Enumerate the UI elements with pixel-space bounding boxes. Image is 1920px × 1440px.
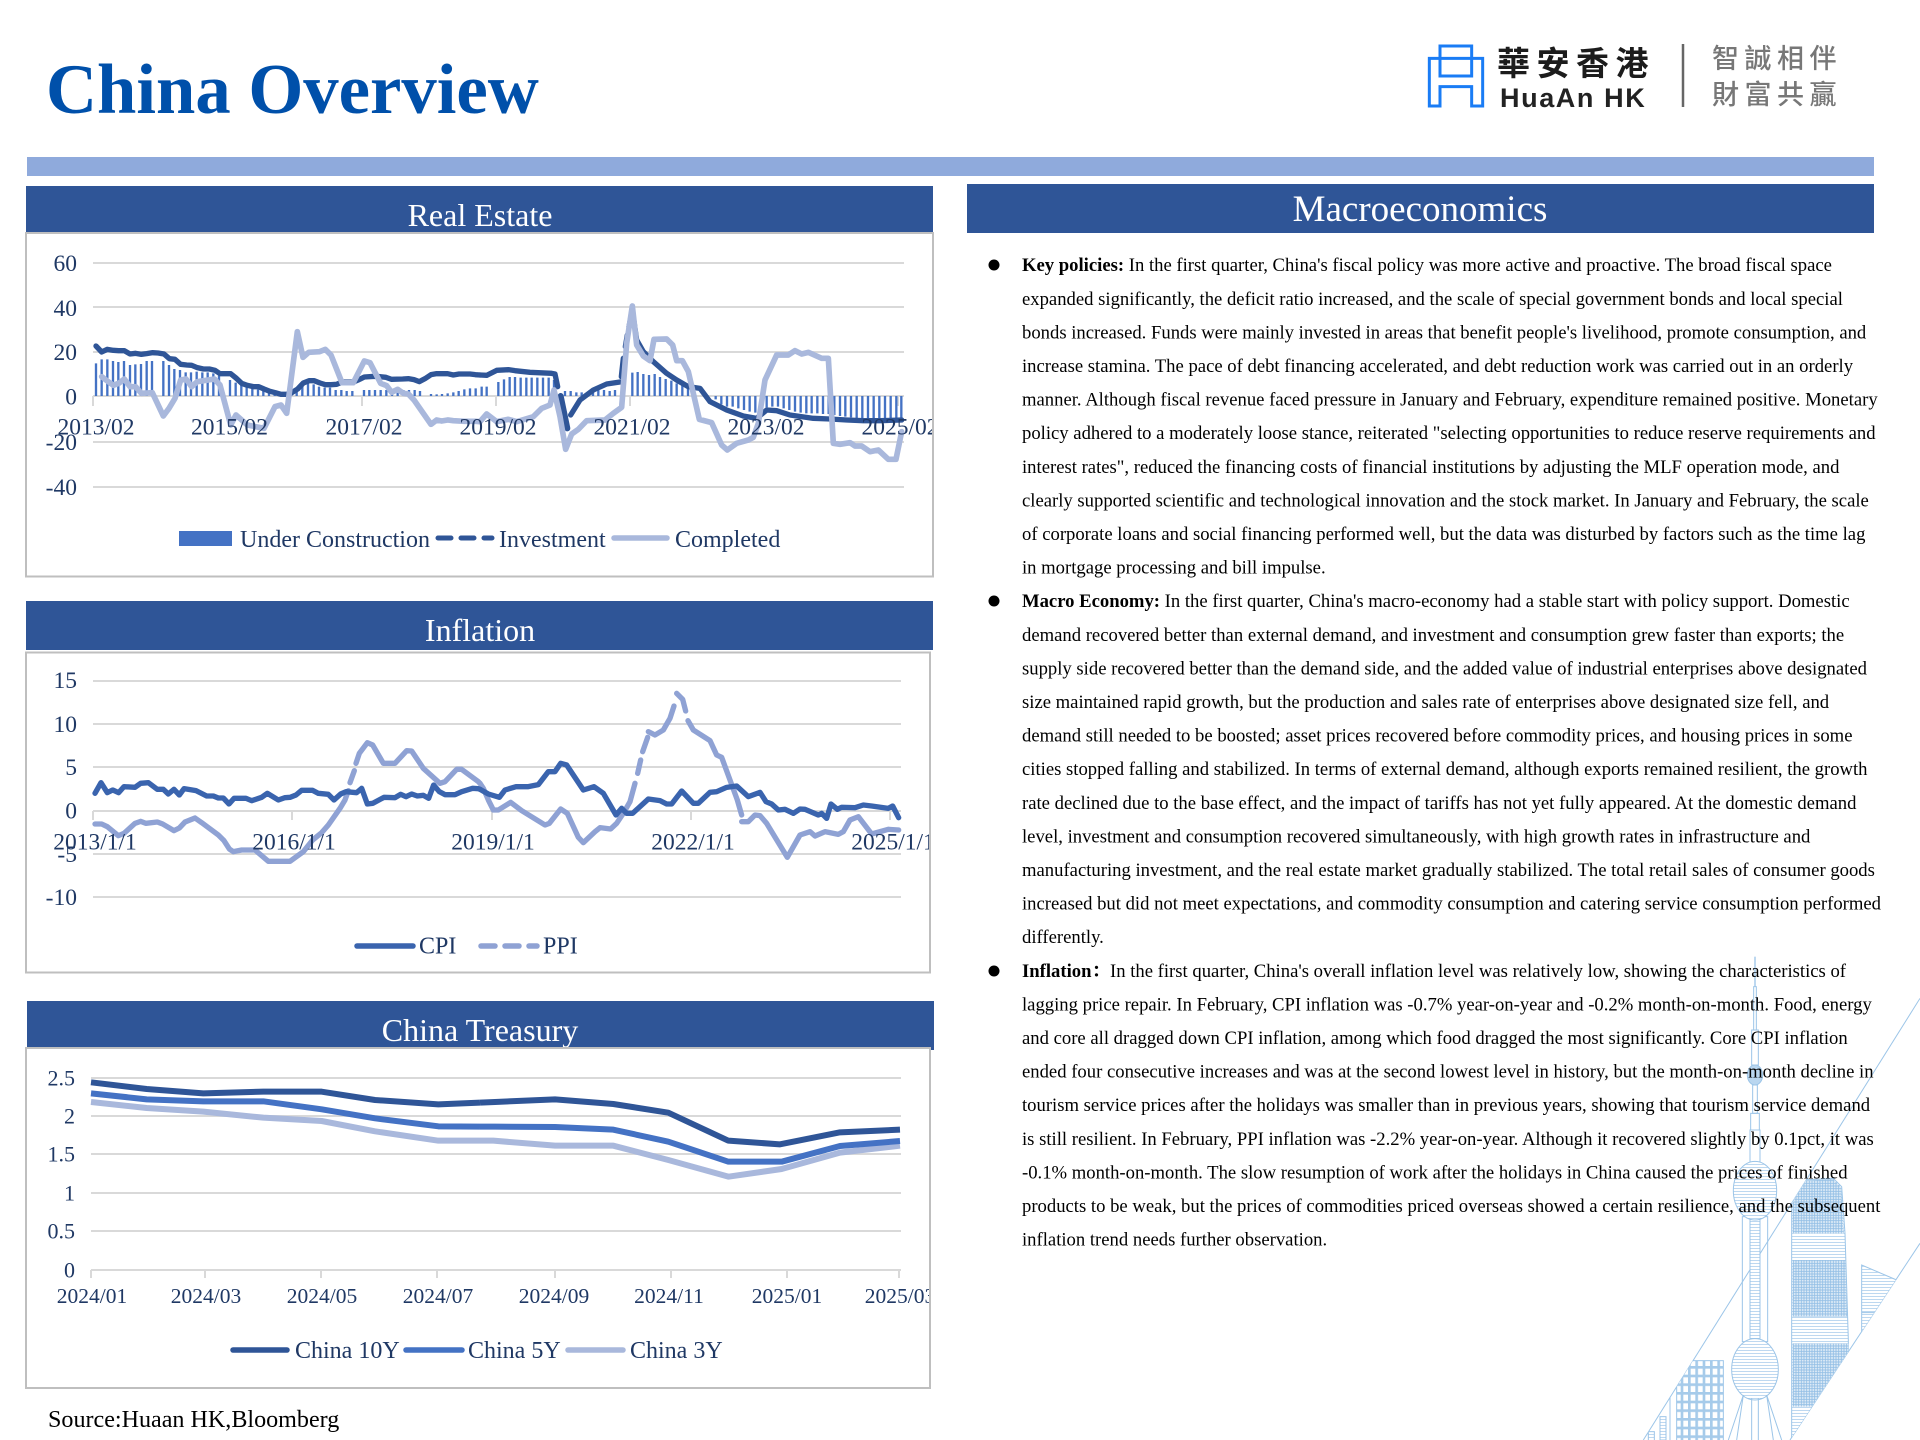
bullet: macro economy	[988, 596, 1000, 606]
x axis labels: 2024/01	[57, 1284, 127, 1308]
legend: China 10Y	[295, 1338, 400, 1364]
legend	[357, 934, 578, 960]
legend: Completed	[675, 527, 780, 553]
text block: macro economy: level, investment and consumption recovered simultaneously, with high growth rates in infrastructure and	[1022, 826, 1811, 847]
text block: inflation: products to be weak, but the prices of commodities priced overseas showed a certain resilience, and the subsequent	[1022, 1196, 1881, 1217]
x axis labels: 2024/09	[519, 1284, 589, 1308]
legend	[179, 527, 780, 553]
title: China Overview	[46, 51, 539, 129]
text block: macro economy: demand still needed to be boosted; asset prices recovered before commodity prices, and housing prices in some	[1022, 726, 1852, 747]
line series: China 5Y	[91, 1093, 900, 1162]
x axis labels	[54, 834, 929, 850]
y axis labels	[46, 251, 77, 501]
x axis labels: 2023/02	[727, 414, 805, 440]
panel heading: Real Estate: Real Estate	[408, 197, 552, 233]
legend	[233, 1338, 723, 1364]
x axis labels: 2016/1/1	[252, 830, 336, 856]
panel: Macroeconomics	[967, 184, 1882, 1251]
y axis labels	[46, 668, 77, 911]
text block: inflation: -0.1% month-on-month. The slow resumption of work after the holidays in China caused the prices of finished	[1022, 1162, 1848, 1183]
logo English name: HuaAn HK	[1500, 83, 1646, 113]
x axis labels: 2024/05	[287, 1284, 357, 1308]
text block: macro economy: manufacturing investment, and the real estate market gradually stabilized. The total retail sales of consumer goods	[1022, 860, 1875, 881]
line series: China 3Y	[91, 1102, 900, 1177]
x axis labels: 2025/01	[752, 1284, 822, 1308]
text block: macro economy: size maintained rapid growth, but the production and sales rate of enterprises above designated size fell, and	[1022, 692, 1830, 713]
bullet: key policies	[988, 260, 1000, 270]
panel heading: Inflation: Inflation	[425, 612, 535, 648]
text block: macro economy: cities stopped falling and stabilized. In terms of external demand, although exports remained resilient, the growth	[1022, 759, 1868, 780]
bullet: inflation	[988, 966, 1000, 976]
panel heading: Macroeconomics	[967, 184, 1874, 233]
text block: key policies: in mortgage processing and bill impulse.	[1022, 558, 1326, 579]
x axis labels	[58, 419, 932, 434]
text block: key policies: Key policies: In the first quarter, China's fiscal policy was more active and proactive. The broad fiscal space	[1022, 255, 1832, 276]
text block: key policies: bonds increased. Funds were mainly invested in areas that benefit people's livelihood, promote consumption, and	[1022, 322, 1867, 343]
text block: key policies: of corporate loans and social financing performed well, but the data was disturbed by factors such as the time lag	[1022, 524, 1865, 545]
legend: Under Construction	[240, 527, 430, 553]
legend: China 3Y	[630, 1338, 723, 1364]
line series: Investment	[96, 310, 902, 428]
x axis labels: 2013/1/1	[53, 830, 137, 856]
text block: macro economy: differently.	[1022, 927, 1104, 948]
logo: HuaAn HK	[1429, 37, 1842, 113]
y axis labels: 60	[54, 251, 77, 277]
text block: key policies: policy adhered to a moderately loose stance, reiterated "selecting opportunities to reduce reserve requirements and	[1022, 423, 1876, 444]
y axis labels: 10	[54, 712, 77, 738]
text block: inflation	[1022, 961, 1881, 1251]
logo Chinese name: 華安香港	[1497, 37, 1655, 85]
panel heading: China Treasury	[27, 1001, 934, 1050]
y axis labels: -5	[57, 842, 77, 868]
header rule band	[27, 157, 1874, 176]
y axis labels: 0	[65, 798, 77, 824]
line series: Completed	[102, 306, 902, 459]
background skyline illustration	[1643, 957, 1920, 1440]
y axis labels: 0.5	[48, 1218, 75, 1244]
text block: inflation: ended four consecutive increases and was at the second lowest level in history, but the month-on-month decline in	[1022, 1062, 1874, 1083]
text block: macro economy: increased but did not meet expectations, and commodity consumption and catering service consumption performed	[1022, 894, 1882, 915]
text block: inflation: In the first quarter, China's overall inflation level was relatively low, showing the characteristics of	[1110, 961, 1847, 982]
y axis labels: 15	[54, 668, 77, 694]
bar series: Under Construction	[96, 359, 901, 418]
legend: PPI	[543, 934, 578, 960]
legend: China 5Y	[468, 1338, 561, 1364]
logo divider	[1682, 44, 1684, 107]
y axis labels: 1	[64, 1180, 75, 1206]
y axis labels: 0	[64, 1258, 75, 1282]
y axis labels: 5	[65, 755, 77, 781]
text block: key policies	[1022, 255, 1878, 579]
x axis labels: 2024/11	[634, 1284, 704, 1308]
text block: inflation: tourism service prices after the holidays was smaller than in previous years, showing that tourism service demand	[1022, 1095, 1871, 1116]
panel: China Treasury	[26, 1001, 935, 1388]
text block: inflation: and core all dragged down CPI inflation, among which food dragged the most significantly. Core CPI inflation	[1022, 1028, 1848, 1049]
y axis labels: 0	[65, 384, 77, 410]
x axis labels: 2019/02	[459, 414, 537, 440]
y axis labels: 40	[54, 296, 77, 322]
y axis labels: 2.5	[48, 1066, 75, 1090]
line series: PPI	[95, 693, 899, 861]
y axis labels: 1.5	[48, 1142, 75, 1166]
line series: CPI	[95, 763, 899, 818]
panel heading: China Treasury: China Treasury	[382, 1012, 578, 1048]
text block: key policies: clearly supported scientific and technological innovation and the stock market. In January and February, the scale	[1022, 490, 1869, 511]
x axis labels: 2024/07	[403, 1284, 473, 1308]
x axis labels	[58, 1289, 929, 1303]
y axis labels: -20	[46, 430, 77, 456]
line series: China 10Y	[91, 1082, 900, 1144]
y axis labels	[48, 1066, 75, 1282]
text block: inflation: inflation trend needs further observation.	[1022, 1230, 1327, 1251]
y axis labels: 2	[64, 1104, 75, 1128]
text block: key policies: expanded significantly, the deficit ratio increased, and the scale of special government bonds and local special	[1022, 289, 1843, 310]
x axis labels: 2022/1/1	[651, 830, 735, 856]
text block: key policies: manner. Although fiscal revenue faced pressure in January and February, expenditure remained positive. Monetary	[1022, 390, 1878, 411]
legend: Investment	[499, 527, 606, 553]
text block: macro economy	[1022, 591, 1882, 948]
y axis labels: -40	[46, 475, 77, 501]
panel: Real Estate	[26, 186, 939, 576]
text block: key policies: interest rates", reduced the financing costs of financial institutions by adjusting the MLF operation mode, and	[1022, 457, 1840, 478]
panel heading: Real Estate	[26, 186, 933, 233]
y axis labels: -10	[46, 885, 77, 911]
x axis labels: 2021/02	[593, 414, 671, 440]
text block: macro economy: supply side recovered better than the demand side, and the added value of industrial enterprises above designated	[1022, 658, 1868, 679]
x axis labels: 2025/02	[861, 414, 939, 440]
text block: macro economy: Macro Economy: In the first quarter, China's macro-economy had a stable start with policy support. Domestic	[1022, 591, 1850, 612]
text block: inflation: lagging price repair. In February, CPI inflation was -0.7% year-on-year and -0.2% month-on-month. Food, energy	[1022, 994, 1872, 1015]
icon: logo mark	[1429, 46, 1483, 106]
x axis labels: 2015/02	[191, 414, 268, 440]
text block: key policies: increase stamina. The pace of debt financing accelerated, and debt reduction work was carried out in an orderly	[1022, 356, 1854, 377]
x axis labels: 2024/03	[171, 1284, 241, 1308]
y axis labels: 20	[54, 340, 77, 366]
x axis labels: 2017/02	[325, 414, 403, 440]
logo: HuaAn HK: 財富共贏	[1712, 73, 1842, 112]
panel heading: Macroeconomics: Macroeconomics	[1293, 189, 1547, 230]
source note: Source:Huaan HK,Bloomberg	[48, 1407, 339, 1433]
x axis labels: 2013/02	[57, 414, 135, 440]
text block: inflation: is still resilient. In February, PPI inflation was -2.2% year-on-year. Although it recovered slightly by 0.1pct, it was	[1022, 1129, 1874, 1150]
logo slogan: 智誠相伴	[1712, 37, 1842, 76]
text block: macro economy: demand recovered better than external demand, and investment and consumption grew faster than exports; the	[1022, 625, 1844, 646]
x axis labels: 2025/03	[865, 1284, 935, 1308]
text block: macro economy: rate declined due to the base effect, and the impact of tariffs has not yet fully appeared. At the domestic demand	[1022, 793, 1857, 814]
text block: inflation: Inflation：	[1022, 961, 1110, 982]
panel: Inflation	[26, 601, 935, 972]
panel heading: Inflation	[26, 601, 933, 650]
legend: CPI	[419, 934, 456, 960]
x axis labels: 2019/1/1	[451, 830, 535, 856]
x axis labels: 2025/1/1	[851, 830, 935, 856]
